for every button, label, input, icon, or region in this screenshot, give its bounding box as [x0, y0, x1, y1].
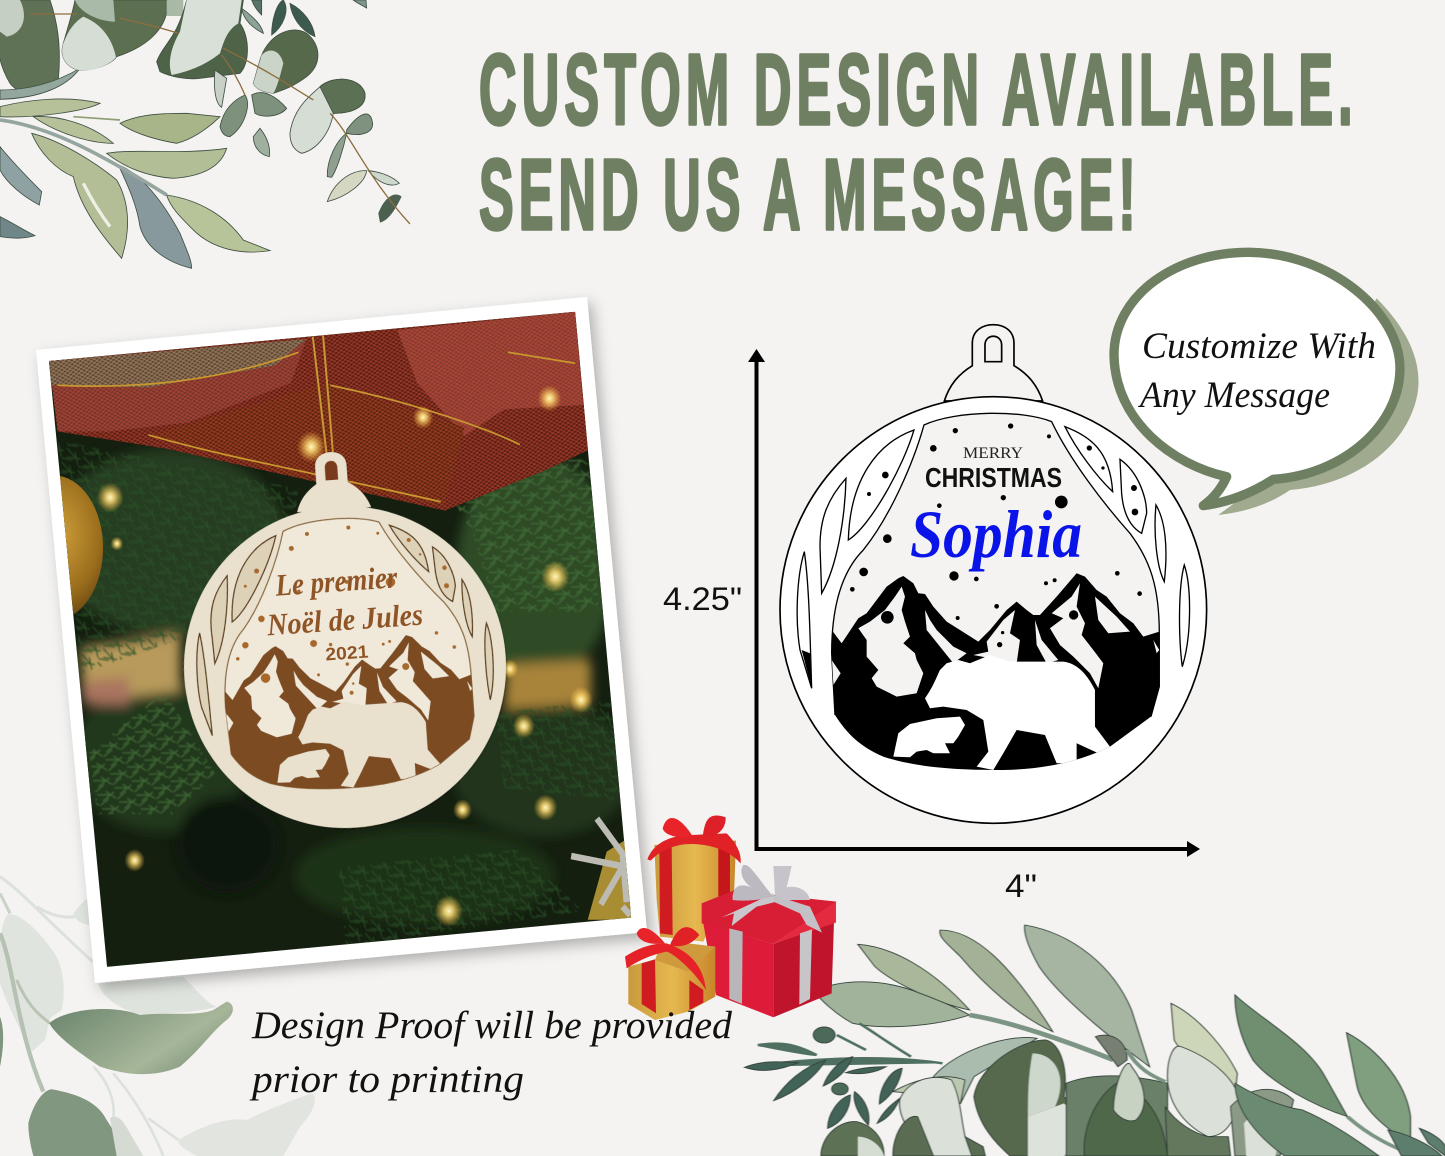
speech bubble: [1114, 252, 1419, 515]
tree needles: [58, 440, 619, 946]
ornament outline: [780, 325, 1207, 823]
ornament engraved text: 2021: [325, 641, 369, 664]
photo: ornament on Christmas tree: [4, 295, 662, 999]
red ribbon: [49, 312, 591, 511]
ornament text: name: Sophia: [910, 496, 1082, 572]
bubble shape: [1114, 252, 1419, 515]
ornament engraved text: Le premier: [273, 559, 399, 603]
photo frame: [36, 297, 647, 983]
ornament engraved text: [262, 558, 426, 668]
photo scene: [49, 312, 632, 967]
gold bauble: [60, 476, 104, 615]
width label: 4": [1005, 868, 1037, 904]
ornament design proof: [780, 325, 1207, 823]
caption: design proof note: [249, 1004, 733, 1101]
tree lights: [97, 385, 593, 927]
ornament text: merry: MERRY: [963, 445, 1023, 462]
bubble text: Customize With: [1142, 326, 1376, 367]
bubble text: [1137, 326, 1376, 416]
gift boxes: [625, 816, 837, 1020]
decoration: bottom-right eucalyptus branch: [744, 925, 1445, 1156]
silver snowflake and gold decoration: [571, 819, 634, 920]
ornament text: christmas: CHRISTMAS: [925, 462, 1062, 493]
title: CUSTOM DESIGN AVAILABLE.: [479, 34, 1353, 145]
caption: design proof note: prior to printing: [249, 1058, 524, 1101]
bubble text: Any Message: [1137, 375, 1330, 416]
wooden ornament in photo: [184, 452, 508, 828]
title: [479, 34, 1353, 250]
ornament body: [184, 452, 508, 828]
red gift box: [702, 865, 837, 1017]
ornament engraved text: Noël de Jules: [265, 597, 424, 642]
small gold gift: [625, 927, 715, 1020]
gold cylinder gift: [647, 816, 741, 942]
decoration: top-left eucalyptus leaves: [0, 0, 410, 268]
caption: design proof note: Design Proof will be provided: [251, 1004, 733, 1047]
decoration: bottom-left pale leaves: [0, 877, 315, 1156]
height label: 4.25": [663, 581, 742, 617]
dimension arrows: [748, 349, 1200, 857]
title: SEND US A MESSAGE!: [479, 139, 1136, 250]
